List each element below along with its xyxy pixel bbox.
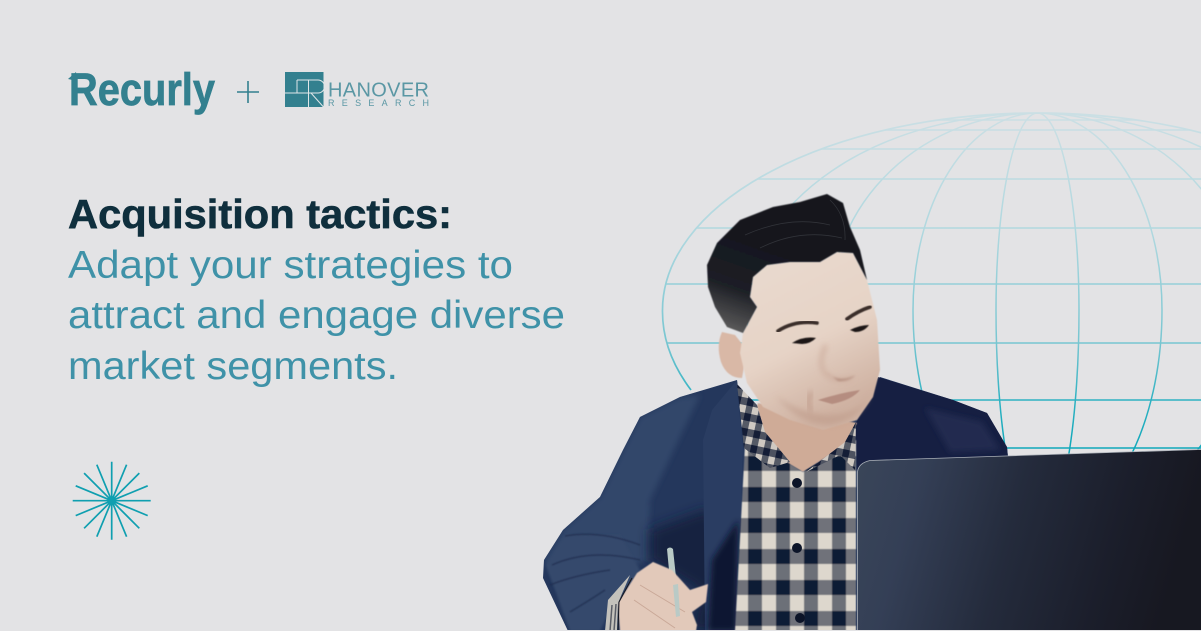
forearm tone [547, 564, 640, 630]
pen [667, 548, 680, 618]
logo: Recurly: Recurly [69, 64, 215, 115]
subheading: Adapt your strategies to [68, 244, 513, 287]
right eye [850, 325, 869, 332]
right shoulder tone [925, 408, 1000, 452]
left eyebrow [778, 322, 817, 331]
sleeve folds [550, 534, 640, 612]
logo: Hanover Research [285, 72, 429, 108]
jacket [543, 377, 1008, 631]
cheek line shading [808, 392, 812, 412]
hand [618, 562, 708, 631]
shirt [735, 440, 856, 631]
left collar [737, 384, 790, 468]
face [740, 252, 880, 430]
laptop [857, 450, 1201, 631]
subheading: attract and engage diverse [68, 294, 565, 337]
logo: Hanover Research: HANOVER [328, 80, 429, 102]
subheading [68, 244, 565, 388]
mouth [818, 390, 860, 404]
icon: starburst [73, 462, 151, 540]
neck [747, 403, 857, 472]
globe grid [662, 112, 1201, 454]
sleeve and shoulder tone [544, 394, 697, 564]
nose side shadow [821, 345, 852, 380]
lower face shading [775, 392, 872, 425]
finger lines [634, 585, 685, 628]
pen lower [673, 584, 680, 617]
hair [707, 194, 867, 333]
ear [719, 332, 747, 378]
nose shadow underside [826, 372, 856, 381]
jacket tones [544, 395, 742, 631]
hair highlights [745, 200, 845, 248]
striped cuff [605, 575, 632, 631]
left eye [792, 338, 816, 344]
right jacket [855, 377, 1008, 472]
heading: Acquisition tactics: [68, 191, 452, 237]
lapel shadow [708, 520, 738, 631]
right collar [806, 422, 856, 472]
jacket lapel [703, 380, 743, 631]
shirt placket buttons [792, 478, 805, 623]
bottom edge [0, 630, 1201, 631]
plus sign [237, 81, 259, 103]
photo: man at laptop [543, 194, 1201, 631]
right eyebrow [847, 307, 870, 319]
subheading: market segments. [68, 345, 398, 388]
torso shadow [650, 510, 742, 631]
logo: Hanover Research: RESEARCH [328, 98, 429, 108]
